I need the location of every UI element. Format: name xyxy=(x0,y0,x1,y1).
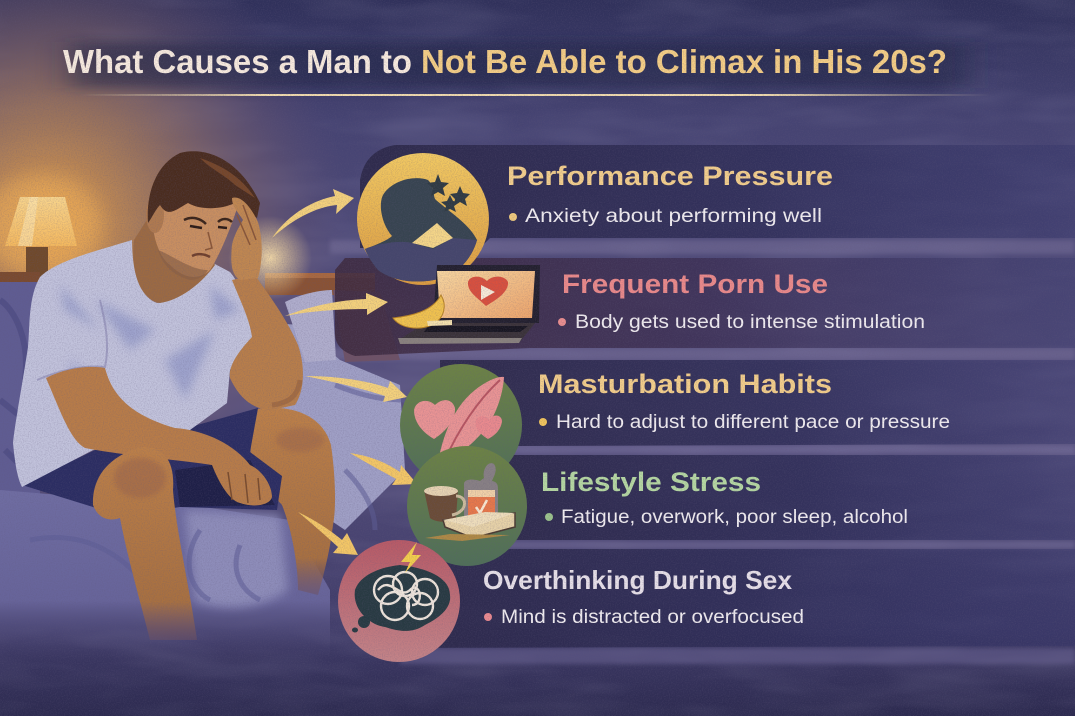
text block: masturbation habits: Masturbation Habits xyxy=(538,369,832,399)
text block: lifestyle stress: Lifestyle Stress xyxy=(541,467,761,497)
supporting arm xyxy=(230,275,303,410)
bedroom scene xyxy=(0,151,405,660)
title: Not Be Able to Climax in His 20s? xyxy=(421,43,947,80)
panel: lifestyle stress background xyxy=(480,455,1075,540)
text block: frequent porn use: Frequent Porn Use xyxy=(562,269,828,299)
text block: lifestyle stress xyxy=(541,467,908,528)
text block: lifestyle stress: Fatigue, overwork, poor sleep, alcohol xyxy=(561,507,908,528)
arrow: to lifestyle stress xyxy=(350,453,417,485)
panel: performance pressure background xyxy=(360,145,1075,248)
text block: frequent porn use: Body gets used to intense stimulation xyxy=(575,312,925,333)
icon: tangled brain with lightning xyxy=(338,540,460,662)
shorts xyxy=(22,408,282,517)
head xyxy=(146,188,238,280)
title xyxy=(63,42,990,96)
icon: laptop and banana xyxy=(393,265,540,344)
text block: overthinking during sex: Mind is distracted or overfocused xyxy=(501,607,804,628)
neck xyxy=(133,215,215,303)
bed xyxy=(0,282,405,660)
arrow: to overthinking xyxy=(298,512,358,555)
text block: masturbation habits: Hard to adjust to different pace or pressure xyxy=(556,412,950,433)
near arm and fist xyxy=(46,367,272,505)
icon: coffee, bottle and book xyxy=(407,446,527,566)
text block: overthinking during sex xyxy=(483,565,804,628)
lamp xyxy=(0,175,102,277)
near leg xyxy=(93,447,197,640)
arrow: to masturbation habits xyxy=(305,376,407,402)
icon: head in hands with stars xyxy=(357,153,489,285)
text block: performance pressure: Performance Pressure xyxy=(507,161,833,191)
arrow: to frequent porn use xyxy=(285,293,388,316)
text block: performance pressure: Anxiety about performing well xyxy=(525,206,822,227)
panel: frequent porn use background xyxy=(335,258,1075,356)
text block: overthinking during sex: Overthinking During Sex xyxy=(483,565,793,595)
hair xyxy=(148,151,260,223)
text block: masturbation habits xyxy=(538,369,950,433)
panel: overthinking background xyxy=(370,549,1075,648)
text block: performance pressure xyxy=(507,161,833,227)
icon: hearts and feather xyxy=(400,364,522,486)
panel: masturbation habits background xyxy=(440,360,1075,446)
arrow: to performance pressure xyxy=(272,189,354,238)
text block: frequent porn use xyxy=(558,269,925,333)
far leg xyxy=(250,408,335,595)
t-shirt xyxy=(13,240,252,487)
headboard xyxy=(0,272,375,295)
hand on head xyxy=(231,197,262,280)
title: What Causes a Man to xyxy=(63,43,412,80)
